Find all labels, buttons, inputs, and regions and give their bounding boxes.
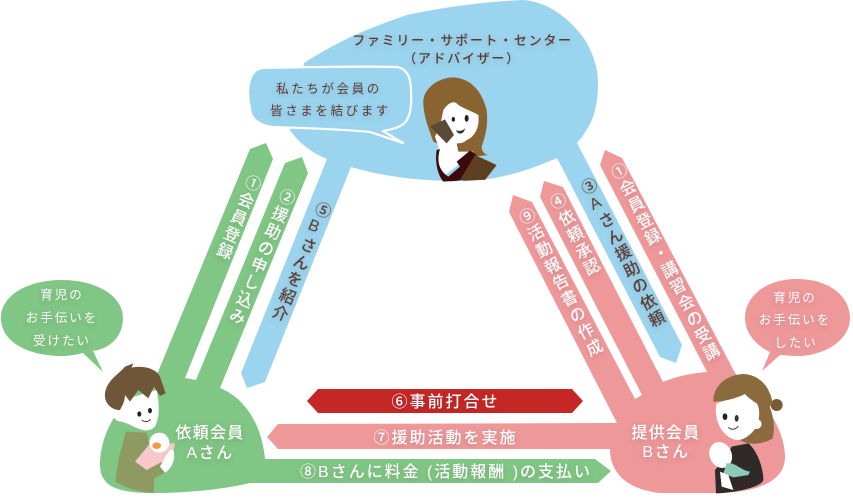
arrow: step 4 accept request: ④依頼承認 (545, 190, 603, 281)
label: member A (175, 424, 245, 462)
label: member A: Aさん (186, 444, 234, 462)
bubble text: 育児の (773, 290, 817, 305)
heading: center name: （アドバイザー） (403, 51, 521, 66)
bubble text: お手伝いを (26, 311, 98, 325)
arrow: step 9 activity report: ⑨活動報告書の作成 (514, 205, 606, 361)
arrow: step 6 preliminary meeting: ⑥事前打合せ (391, 393, 500, 411)
bubble text (26, 287, 98, 348)
arrow: step 1 member registration (A): ①会員登録 (211, 171, 264, 264)
bubble text: 受けたい (33, 334, 91, 348)
arrow: step 3 request to A: ③Aさん援助の依頼 (576, 175, 668, 332)
arrow: step 1 registration and training (B): ①会員登録・講習会の受講 (606, 160, 723, 365)
illustration: advisor on phone (423, 77, 497, 182)
label: member B: Bさん (642, 443, 690, 461)
speech bubble: member A wish (1, 280, 123, 372)
bubble text: 私たちが会員の (276, 81, 382, 96)
bubble text: 皆さまを結びます (270, 104, 391, 118)
speech bubble: member B wish (745, 279, 850, 371)
bubble text: 育児の (40, 287, 84, 302)
label: member B (631, 424, 701, 461)
speech bubble: advisor (248, 67, 411, 143)
label: member A: 依頼会員 (175, 424, 245, 442)
panel: member B blob with arrows (267, 150, 785, 493)
bubble text: したい (774, 336, 818, 350)
label: step 7 carry out support: ⑦援助活動を実施 (373, 429, 518, 447)
bubble text (759, 290, 831, 350)
bubble text (270, 81, 391, 118)
label: member B: 提供会員 (631, 424, 701, 442)
arrow: step 2 support request: ②援助の申し込み (224, 185, 298, 329)
bubble text: お手伝いを (759, 313, 831, 327)
arrow: step 5 introduce B: ⑤Bさんを紹介 (267, 198, 334, 326)
illustration: mother with baby (705, 374, 783, 493)
panel: member A blob with arrows (100, 143, 611, 493)
arrow: step 6 preliminary meeting (307, 389, 583, 413)
heading: center name: ファミリー・サポート・センター (352, 33, 573, 48)
label: step 8 payment to B: ⑧Bさんに料金 (活動報酬 )の支払い (300, 463, 590, 481)
panel: family support center blob with arrows (241, 0, 682, 388)
heading: center name (352, 33, 573, 66)
illustration: father with baby (105, 363, 175, 493)
